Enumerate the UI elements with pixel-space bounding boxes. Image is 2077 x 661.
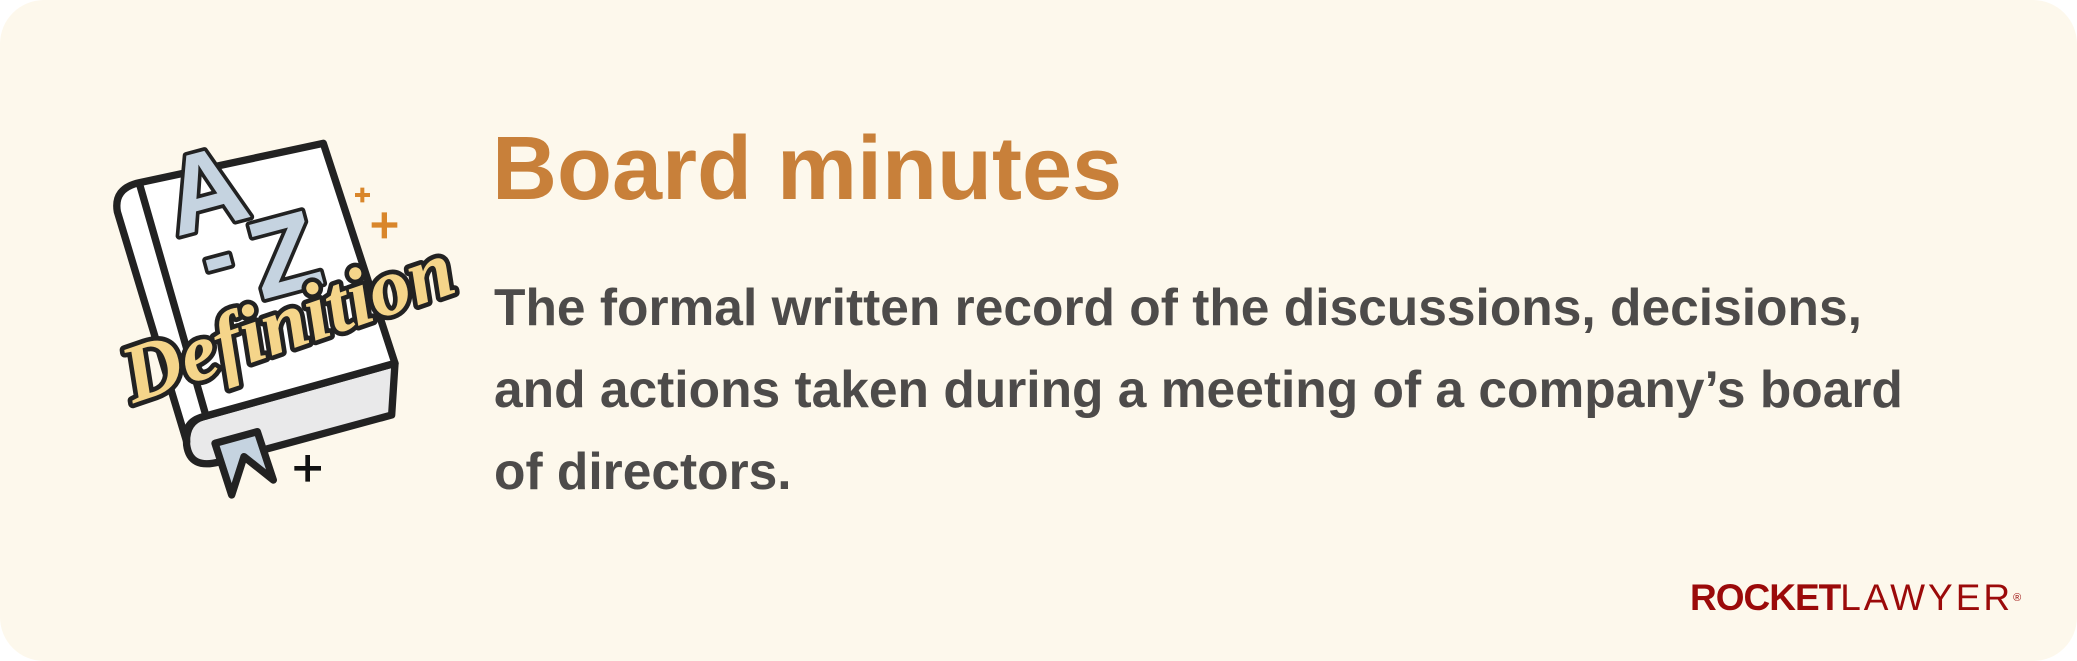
definition text: The formal written record of the discussions, decisions, bbox=[494, 278, 1862, 336]
icon: A-Z definition book: Z bbox=[236, 187, 333, 323]
icon: A-Z definition book bbox=[109, 120, 460, 499]
icon: A-Z definition book: A bbox=[151, 120, 260, 260]
definition text bbox=[494, 278, 1903, 500]
definition text: and actions taken during a meeting of a company’s board bbox=[494, 360, 1903, 418]
icon: A-Z definition book: Definition bbox=[109, 222, 460, 421]
definition text: of directors. bbox=[494, 442, 792, 500]
title: Board minutes bbox=[492, 119, 1122, 219]
icon: A-Z definition book: - bbox=[188, 201, 245, 309]
logo: Rocket Lawyer: ROCKETLAWYER® bbox=[1690, 577, 2021, 618]
